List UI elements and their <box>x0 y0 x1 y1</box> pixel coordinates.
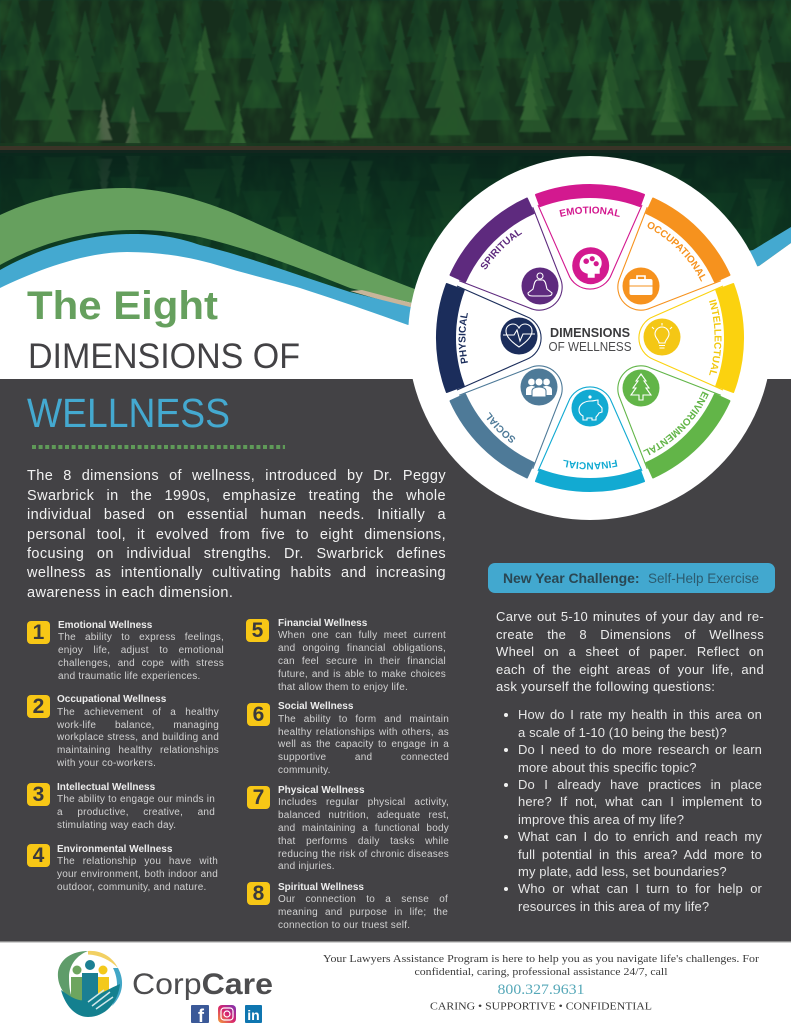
text: 5 <box>252 619 263 642</box>
text: workplace stress, and building and <box>57 732 219 743</box>
text: and maintaining a functional body <box>278 823 449 834</box>
text: 6 <box>253 703 264 726</box>
segment: social <box>450 365 563 478</box>
exercise question list: my plate, add less, set boundaries? <box>518 864 727 879</box>
text: that performs daily tasks while <box>278 836 449 847</box>
photo: forest and lake <box>0 0 791 331</box>
text: meaning and purpose in life; the <box>278 907 448 918</box>
text: stimulating way each day. <box>57 820 176 831</box>
icon: spiritual meditation <box>522 268 558 304</box>
intro paragraph: personal tool, it evolved from five to eight dimensions, <box>27 527 446 543</box>
dotted divider <box>32 445 285 449</box>
item 1: emotional wellness: Emotional Wellness <box>58 620 152 631</box>
text: The ability to express feelings, <box>58 632 224 643</box>
text: 4 <box>33 844 44 867</box>
item 4: environmental wellness <box>27 844 218 893</box>
footer text: 800.327.9631 <box>498 982 584 998</box>
segment: physical: PHYSICAL <box>458 313 468 364</box>
text: enjoy life, adjust to emotional <box>58 645 224 656</box>
item 7: physical wellness: Physical Wellness <box>278 785 365 796</box>
text: Our connection to a sense of <box>278 894 448 905</box>
segment: emotional: EMOTIONAL <box>560 206 620 217</box>
text: 2 <box>33 695 44 718</box>
text: outdoor, community, and nature. <box>57 882 206 893</box>
text: 8 <box>253 882 264 905</box>
text: and injuries. <box>278 861 335 872</box>
icon: intellectual light bulb <box>644 318 680 356</box>
exercise instructions: each of the eight areas of your life, and <box>496 662 764 677</box>
text: The ability to form and maintain <box>278 714 449 725</box>
intro paragraph <box>27 468 446 601</box>
wheel center label: OF WELLNESS <box>548 340 632 354</box>
exercise question list: Who or what can I turn to for help or <box>518 881 762 896</box>
intro paragraph: wellness as intentionally cultivating habits and increasing <box>27 565 446 581</box>
exercise question list: improve this area of my life? <box>518 812 684 827</box>
intro paragraph: Swarbrick in the 1990s, emphasize treating the whole <box>27 488 446 504</box>
callout: new year challenge header <box>488 563 775 593</box>
icon: emotional head <box>572 247 609 284</box>
segment: financial: FINANCIAL <box>563 460 618 470</box>
segment: environmental: ENVIRONMENTAL <box>643 391 709 456</box>
exercise question list: Do I need to do more research or learn <box>518 742 762 757</box>
text: challenges, and cope with stress <box>58 658 224 669</box>
footer text: confidential, caring, professional assistance 24/7, call <box>414 967 668 978</box>
logo: CorpCare wordmark: CorpCare <box>132 968 273 1001</box>
item 7: physical wellness <box>247 785 449 872</box>
footer text: CARING • SUPPORTIVE • CONFIDENTIAL <box>430 1002 652 1012</box>
title: The Eight: The Eight <box>27 284 218 328</box>
intro paragraph: individual based on essential human needs. Initially a <box>27 507 446 523</box>
text: well as the capacity to engage in a <box>278 739 449 750</box>
text: The achievement of a healthy <box>57 707 219 718</box>
title: Dimensions of: DIMENSIONS OF <box>28 337 300 376</box>
text: connection to our truest self. <box>278 920 410 931</box>
exercise instructions: ask yourself the following questions: <box>496 679 715 694</box>
segment: spiritual <box>450 198 563 311</box>
text: 7 <box>253 786 264 809</box>
text: a productive, creative, and <box>57 807 215 818</box>
segment: physical <box>436 283 542 393</box>
exercise question list <box>504 707 762 914</box>
exercise instructions: Wheel on a sheet of paper. Reflect on <box>496 644 764 659</box>
item 6: social wellness <box>247 701 449 776</box>
exercise instructions <box>496 609 764 694</box>
icon: physical heart <box>500 318 538 354</box>
text: 1 <box>33 621 44 644</box>
intro paragraph: awareness in each dimension. <box>27 585 233 601</box>
intro paragraph: focusing on individual strengths. Dr. Swarbrick defines <box>27 546 446 562</box>
segment: intellectual <box>638 283 744 393</box>
exercise question list: How do I rate my health in this area on <box>518 707 762 722</box>
item 5: financial wellness: Financial Wellness <box>278 618 367 629</box>
dark content panel <box>0 379 791 941</box>
text: can feel secure in their financial <box>278 656 446 667</box>
item 1: emotional wellness <box>27 620 224 682</box>
item 6: social wellness: Social Wellness <box>278 701 353 712</box>
exercise question list: full potential in this area? Add more to <box>518 847 762 862</box>
text: healthy relationships with others, as <box>278 727 449 738</box>
footer panel <box>0 941 791 1024</box>
exercise question list: more about this specific topic? <box>518 760 697 775</box>
text: with your co-workers. <box>57 758 156 769</box>
text: The ability to engage our minds in <box>57 794 215 805</box>
logo: CorpCare mark <box>58 951 122 1017</box>
item 4: environmental wellness: Environmental Wellness <box>57 844 172 855</box>
text: that allow them to enjoy life. <box>278 682 408 693</box>
exercise question list: here? If not, what can I implement to <box>518 794 762 809</box>
blue wave ribbon <box>0 227 791 325</box>
text: The relationship you have with <box>57 856 218 867</box>
title: Wellness: WELLNESS <box>27 390 230 436</box>
segment: occupational: OCCUPATIONAL <box>648 222 706 282</box>
item 3: intellectual wellness <box>27 782 215 831</box>
wheel center label: DIMENSIONS <box>550 325 630 340</box>
wheel center label <box>548 325 632 354</box>
icon: environmental tree <box>622 370 660 406</box>
item 3: intellectual wellness: Intellectual Wellness <box>57 782 155 793</box>
item 2: occupational wellness: Occupational Wellness <box>57 694 166 705</box>
callout: new year challenge header: Self-Help Exercise <box>648 571 759 586</box>
footer text <box>323 954 760 1012</box>
text: and ongoing financial obligations, <box>278 643 446 654</box>
white title background <box>0 243 791 379</box>
segment: social: SOCIAL <box>486 412 516 443</box>
item 8: spiritual wellness <box>247 882 448 931</box>
icon: instagram <box>218 1005 236 1023</box>
icon: financial piggy bank <box>572 390 608 426</box>
green wave <box>0 188 420 305</box>
exercise instructions: Carve out 5-10 minutes of your day and re- <box>496 609 764 624</box>
text: maintaining healthy relationships <box>57 745 219 756</box>
icon: social people <box>520 368 558 406</box>
text: supportive and connected <box>278 752 449 763</box>
text: 3 <box>33 783 44 806</box>
exercise question list: a scale of 1-10 (10 being the best)? <box>518 725 727 740</box>
callout: new year challenge header: New Year Challenge: <box>503 570 640 586</box>
intro paragraph: The 8 dimensions of wellness, introduced by Dr. Peggy <box>27 468 446 484</box>
text: work-life balance, managing <box>57 720 219 731</box>
item 2: occupational wellness <box>27 694 219 769</box>
text: balanced nutrition, adequate rest, <box>278 810 449 821</box>
text: future, and is able to make choices <box>278 669 446 680</box>
exercise question list: What can I do to enrich and reach my <box>518 829 762 844</box>
segment: spiritual: SPIRITUAL <box>480 230 522 270</box>
exercise instructions: create the 8 Dimensions of Wellness <box>496 627 764 642</box>
footer text: Your Lawyers Assistance Program is here to help you as you navigate life's challenges. For <box>323 954 760 965</box>
segment: occupational <box>617 198 730 311</box>
sand sliver <box>350 290 415 310</box>
item 8: spiritual wellness: Spiritual Wellness <box>278 882 364 893</box>
icon: facebook <box>191 1005 209 1024</box>
segment: financial <box>535 386 645 492</box>
text: and traumatic life experiences. <box>58 671 200 682</box>
segment: emotional <box>535 184 645 290</box>
text: When one can fully meet current <box>278 630 446 641</box>
segment: intellectual: INTELLECTUAL <box>709 299 722 376</box>
exercise question list: Do I already have practices in place <box>518 777 762 792</box>
icon: occupational briefcase <box>622 268 660 304</box>
exercise question list: resources in this area of my life? <box>518 899 709 914</box>
text: community. <box>278 765 331 776</box>
item 5: financial wellness <box>246 618 446 693</box>
text: Includes regular physical activity, <box>278 797 449 808</box>
text: reducing the risk of chronic diseases <box>278 849 449 860</box>
segment: environmental <box>617 365 730 478</box>
icon: linkedin: in <box>247 1007 260 1023</box>
icon: linkedin <box>245 1005 262 1023</box>
wellness wheel <box>408 156 768 520</box>
text: your environment, both indoor and <box>57 869 218 880</box>
